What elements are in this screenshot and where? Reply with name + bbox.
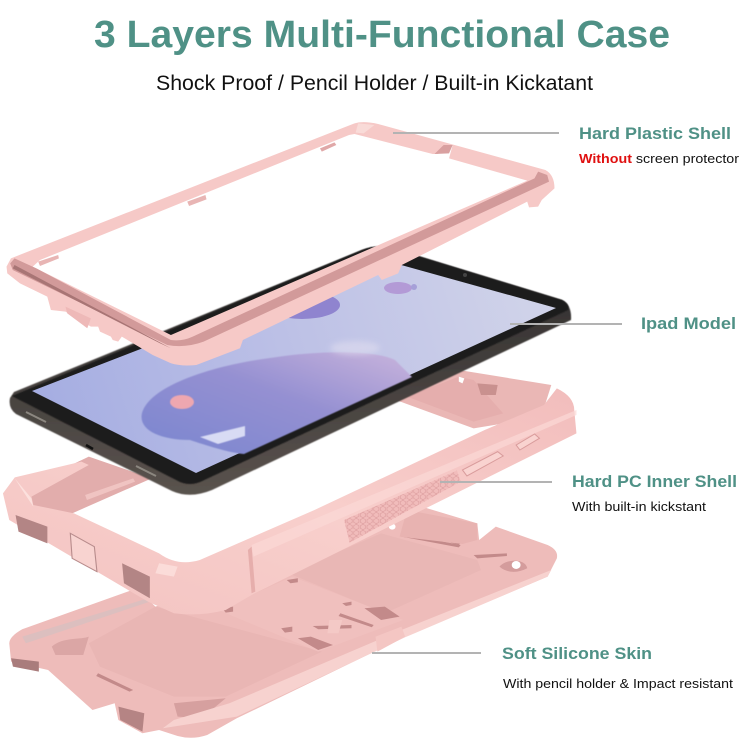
label: soft silicone skin: With pencil holder & Impact resistant bbox=[503, 676, 733, 691]
layer: hard plastic shell bbox=[7, 122, 554, 366]
label: hard PC inner shell: Hard PC Inner Shell bbox=[572, 473, 737, 491]
back wall left bbox=[22, 457, 152, 513]
leader lines bbox=[372, 133, 622, 653]
back wall right bbox=[396, 370, 551, 428]
floor details bbox=[96, 532, 507, 692]
layer: hard PC inner shell bbox=[3, 370, 576, 614]
corner: bottom left bbox=[174, 698, 226, 718]
subtitle: Shock Proof / Pencil Holder / Built-in Kickatant bbox=[156, 72, 593, 95]
honeycomb grip bbox=[344, 471, 461, 543]
ports on the short side bbox=[16, 515, 47, 543]
tablet top face bbox=[12, 246, 568, 484]
wallpaper: large drop bbox=[142, 352, 412, 454]
label: hard PC inner shell bbox=[572, 473, 737, 514]
front strip bbox=[3, 388, 576, 614]
label: hard plastic shell bbox=[579, 125, 740, 166]
outer edge highlights bbox=[163, 570, 551, 728]
layer: soft silicone skin bbox=[9, 507, 557, 738]
shell inner rim bbox=[10, 172, 549, 346]
title: 3 Layers Multi-Functional Case bbox=[94, 14, 670, 56]
tablet screen bbox=[32, 258, 556, 473]
floor: main recess bbox=[89, 607, 322, 697]
label: soft silicone skin: Soft Silicone Skin bbox=[502, 645, 652, 663]
label: ipad model: Ipad Model bbox=[641, 315, 736, 333]
layer: ipad model bbox=[10, 246, 571, 495]
tablet body bbox=[10, 246, 571, 495]
label: hard plastic shell: Without screen protector bbox=[579, 151, 740, 166]
shell clips bbox=[320, 142, 336, 152]
camera bbox=[463, 273, 467, 277]
wallpaper: small drops bbox=[264, 291, 340, 319]
side speaker grilles bbox=[26, 412, 156, 476]
label: hard PC inner shell: With built-in kickstant bbox=[572, 499, 706, 514]
label: hard plastic shell: Hard Plastic Shell bbox=[579, 125, 731, 143]
buttons bbox=[462, 452, 503, 476]
label: soft silicone skin bbox=[502, 645, 733, 691]
